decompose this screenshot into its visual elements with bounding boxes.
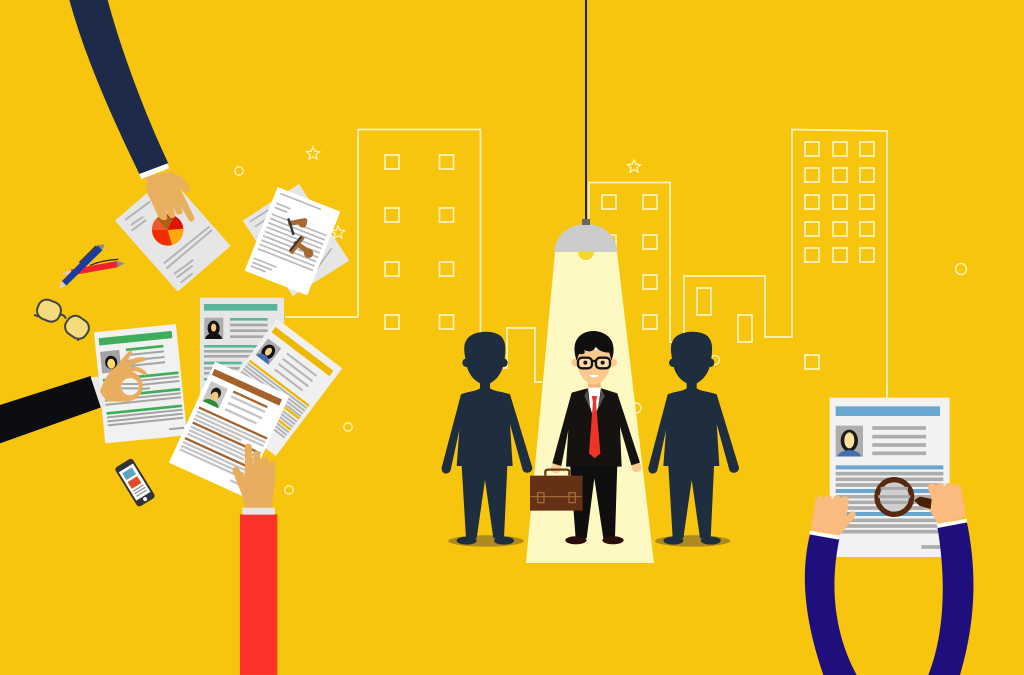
glasses xyxy=(578,358,610,368)
sleeve cuff xyxy=(242,508,275,515)
navy sleeve xyxy=(69,0,168,174)
pens xyxy=(58,244,125,289)
lamp cap xyxy=(582,219,590,225)
hair xyxy=(575,331,614,361)
legs and shoes xyxy=(565,463,624,544)
right cuff xyxy=(937,519,967,528)
shirt cuff xyxy=(139,163,169,179)
connector line from building xyxy=(884,385,889,398)
rubber stamps xyxy=(288,218,313,258)
magnifying glass xyxy=(877,480,932,514)
back page with stamps xyxy=(243,184,349,296)
resume sheet xyxy=(830,398,950,557)
face xyxy=(577,350,611,385)
left blue sleeve xyxy=(805,534,857,675)
lamp cord xyxy=(585,0,587,220)
lamp bulb xyxy=(578,244,594,260)
teal resume xyxy=(200,298,284,411)
glasses on desk xyxy=(34,297,92,342)
pie chart xyxy=(152,214,183,246)
right blue sleeve xyxy=(928,521,973,675)
decorative stars and circles xyxy=(235,147,967,494)
chart document xyxy=(115,175,231,292)
bottom-right hands inspecting resume xyxy=(805,385,973,675)
left resume pile xyxy=(0,298,342,675)
yellow resume xyxy=(211,319,342,456)
top-left arm and document group xyxy=(34,0,349,342)
smile xyxy=(589,375,599,377)
black sleeve xyxy=(0,376,101,443)
green resume xyxy=(94,324,187,443)
lamp shade xyxy=(554,224,618,252)
candidate silhouette left xyxy=(442,332,532,547)
eyes xyxy=(583,361,605,365)
brown-header resume xyxy=(169,362,290,497)
view through finger ring xyxy=(121,378,139,395)
red tie xyxy=(589,396,600,458)
red sleeve xyxy=(240,514,277,675)
pointing hand xyxy=(146,172,194,222)
left hand xyxy=(811,495,856,536)
hands xyxy=(551,462,642,473)
stamped white page xyxy=(245,187,340,295)
OK-gesture hand xyxy=(100,350,147,402)
reaching hand xyxy=(233,444,275,508)
magnifier handle tip xyxy=(919,497,932,509)
ears xyxy=(571,359,617,367)
shirt xyxy=(588,388,601,420)
left cuff xyxy=(809,531,839,540)
light beam xyxy=(526,252,654,563)
suit jacket xyxy=(552,388,640,467)
city skyline outlines xyxy=(285,130,887,400)
lapels xyxy=(584,389,605,408)
brown briefcase xyxy=(530,470,583,511)
chosen businessman in spotlight xyxy=(551,331,642,544)
phone xyxy=(114,458,156,508)
right hand xyxy=(923,483,966,524)
white cuff xyxy=(91,377,106,408)
neck xyxy=(588,377,601,389)
candidate silhouette right xyxy=(648,332,739,547)
hanging lamp with light beam xyxy=(526,0,654,563)
